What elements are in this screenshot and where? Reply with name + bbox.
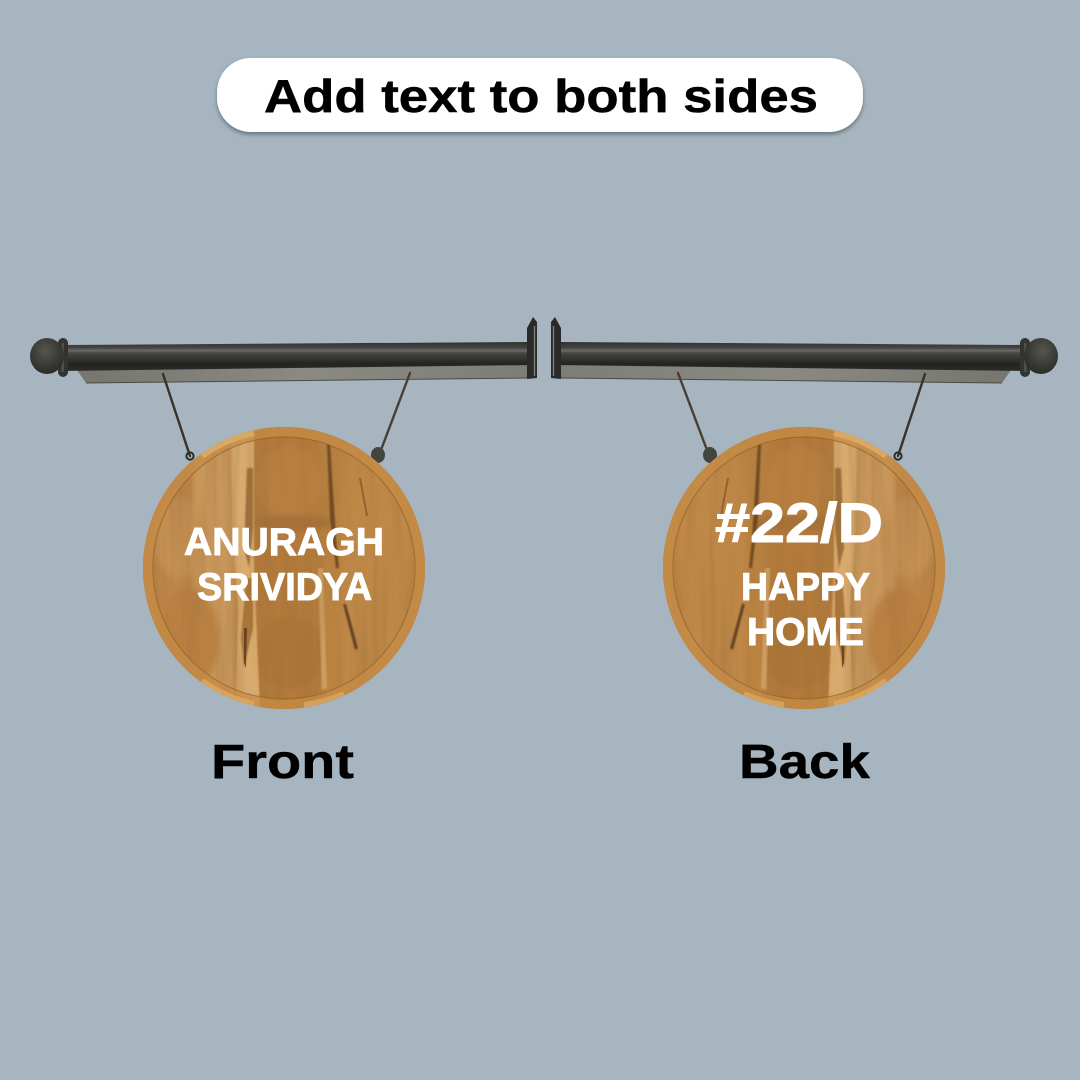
label: Back: Back	[739, 736, 870, 789]
wooden round sign, back	[654, 423, 949, 713]
label: Front: Front	[211, 736, 354, 789]
wooden round sign, front	[139, 423, 434, 713]
back sign text: #22/D: #22/D	[715, 491, 883, 554]
title pill	[217, 58, 863, 132]
front sign text: SRIVIDYA: SRIVIDYA	[197, 566, 372, 609]
title text: Add text to both sides	[264, 70, 818, 122]
front sign text: ANURAGH: ANURAGH	[184, 521, 384, 564]
back sign text: HAPPY: HAPPY	[741, 566, 870, 609]
icon: right rod with bracket and hanging wires	[551, 317, 1058, 463]
back sign text: HOME: HOME	[747, 611, 864, 654]
panel: front sign	[30, 317, 537, 789]
icon: left rod with bracket and hanging wires	[30, 317, 537, 463]
panel: back sign	[551, 317, 1058, 789]
